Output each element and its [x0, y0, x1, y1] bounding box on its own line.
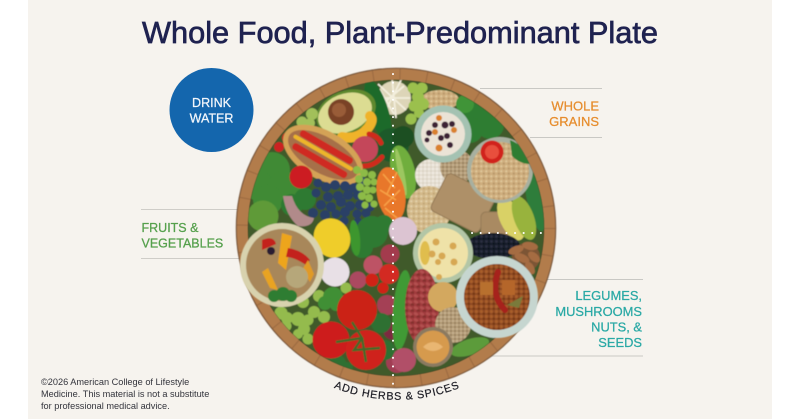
right edge leaf [525, 173, 544, 232]
herb leaves centre bottom [325, 313, 395, 374]
green herb sprig [318, 287, 343, 311]
quinoa bottom [435, 307, 471, 343]
quinoa top [421, 90, 459, 110]
shredded carrots [376, 166, 406, 222]
edamame [353, 166, 378, 208]
green lettuce left [244, 152, 316, 216]
yellow pepper [342, 116, 372, 138]
food on plate [240, 76, 549, 376]
copyright notice: Medicine. This material is not a substitute [41, 389, 209, 399]
lettuce bottom [449, 333, 491, 361]
chickpeas [428, 282, 458, 312]
chili bowl [456, 256, 538, 338]
label: whole grains [480, 88, 602, 138]
kidney beans [405, 269, 439, 345]
label: fruits and vegetables: VEGETABLES [142, 236, 223, 250]
lemon [312, 218, 352, 258]
label: legumes, mushrooms, nuts and seeds: LEGUMES, [575, 288, 642, 303]
wooden plate rim [236, 68, 556, 388]
taco with peppers [282, 124, 364, 186]
tan grains [407, 186, 451, 234]
garlic bulb left [320, 258, 350, 286]
hummus bowl [413, 223, 473, 283]
avocado slices [496, 196, 537, 242]
white sesame grain [415, 159, 447, 191]
mixed quinoa [440, 152, 470, 182]
dark kale and romaine centre [364, 81, 416, 200]
copyright notice: ©2026 American College of Lifestyle [41, 377, 189, 387]
green grapes by avocado [296, 108, 318, 128]
oatmeal bowl with raisins [414, 106, 472, 162]
callout: drink water: WATER [190, 112, 233, 126]
label: legumes, mushrooms, nuts and seeds [490, 280, 643, 356]
red potato [352, 136, 378, 162]
peanut butter bowl [413, 327, 453, 367]
jalapeno [349, 220, 360, 256]
long green leaf [390, 269, 414, 351]
callout: drink water [170, 68, 254, 152]
avocado half [316, 89, 376, 135]
label: legumes, mushrooms, nuts and seeds: SEEDS [598, 335, 642, 350]
shallot [283, 196, 314, 226]
dotted divider lines [393, 74, 541, 384]
red onion bottom [392, 348, 416, 372]
radishes and cherry tomatoes [350, 244, 408, 373]
whole grain bread [430, 173, 510, 236]
green grapes bottom [274, 282, 352, 344]
label: fruits and vegetables [141, 210, 240, 258]
greens base [248, 80, 544, 376]
title: Whole Food, Plant-Predominant Plate [142, 15, 658, 50]
roasted pepper bowl [240, 223, 324, 307]
label: whole grains: GRAINS [549, 114, 599, 129]
label: legumes, mushrooms, nuts and seeds: NUTS, & [591, 320, 642, 334]
red pepper strips [364, 134, 382, 166]
copyright notice: for professional medical advice. [41, 401, 170, 411]
dark spinach centre [351, 215, 393, 258]
label: legumes, mushrooms, nuts and seeds: MUSHROOMS [555, 304, 642, 319]
curved label: add herbs and spices: ADD HERBS & SPICES [334, 382, 459, 400]
large tomatoes [312, 290, 386, 370]
tomato [290, 166, 312, 188]
blueberries [308, 176, 374, 226]
label: fruits and vegetables: FRUITS & [142, 221, 199, 235]
parsley top right [456, 95, 510, 143]
garlic bulb centre [389, 217, 417, 245]
grain bowl with tomato [467, 137, 533, 203]
label: whole grains: WHOLE [551, 98, 599, 114]
callout: drink water: DRINK [192, 96, 232, 110]
lime [248, 200, 278, 232]
bean sprouts [376, 78, 411, 118]
cherry tomatoes [273, 132, 286, 153]
black beans [466, 233, 520, 259]
green grapes top [406, 82, 429, 124]
almonds [507, 241, 542, 276]
